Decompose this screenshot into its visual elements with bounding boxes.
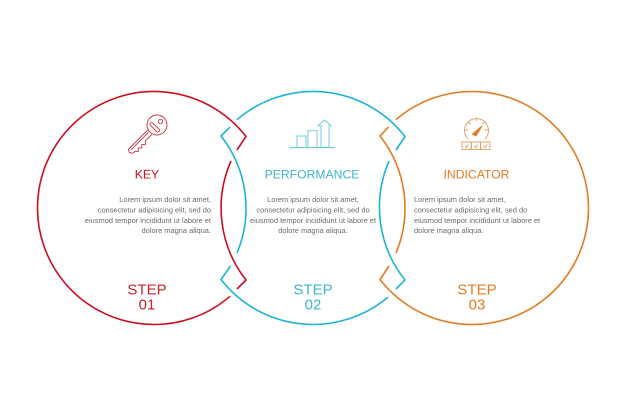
text block: indicator description: consectetur adipisicing elit, sed do	[414, 206, 527, 214]
step label 03: STEP	[457, 282, 497, 298]
text block: performance description: Lorem ipsum dolor sit amet,	[267, 195, 359, 204]
heading: KEY: KEY	[135, 168, 159, 182]
text block: key description: dolore magna aliqua.	[142, 226, 211, 235]
heading: PERFORMANCE: PERFORMANCE	[265, 168, 359, 182]
step label 01	[127, 282, 167, 314]
step label 02: STEP	[293, 282, 333, 298]
panel: step 3 indicator	[380, 92, 588, 325]
text block: key description: Lorem ipsum dolor sit amet,	[119, 195, 211, 204]
panel: step 1 key	[38, 91, 246, 324]
text block: indicator description	[414, 195, 541, 235]
text block: performance description: consectetur adipisicing elit, sed do	[256, 206, 370, 214]
red circle outline	[38, 91, 246, 324]
text block: performance description: dolore magna aliqua.	[278, 226, 348, 235]
icon: rising bars with arrow	[290, 120, 335, 148]
blue circle outline	[221, 91, 405, 324]
step label 02: 02	[305, 296, 321, 314]
text block: performance description: eiusmod tempor incididunt ut labore et	[250, 216, 377, 225]
panel: step 2 performance	[221, 91, 405, 324]
step label 01: STEP	[127, 282, 167, 298]
text block: indicator description: Lorem ipsum dolor sit amet,	[414, 195, 506, 204]
text block: key description: eiusmod tempor incididunt ut labore et	[85, 216, 212, 225]
text block: performance description	[250, 195, 377, 235]
icon: key	[122, 111, 171, 160]
step label 03: 03	[469, 296, 485, 314]
step label 01: 01	[139, 296, 155, 314]
text block: indicator description: eiusmod tempor incididunt ut labore et	[414, 216, 541, 225]
text block: indicator description: dolore magna aliqua.	[414, 226, 483, 235]
text block: key description: consectetur adipisicing elit, sed do	[98, 206, 211, 214]
step label 02	[293, 282, 333, 314]
text block: key description	[85, 195, 212, 235]
step label 03	[457, 282, 497, 314]
heading: INDICATOR: INDICATOR	[444, 168, 510, 182]
orange circle outline	[380, 92, 588, 325]
icon: gauge with checkboxes	[462, 118, 490, 150]
